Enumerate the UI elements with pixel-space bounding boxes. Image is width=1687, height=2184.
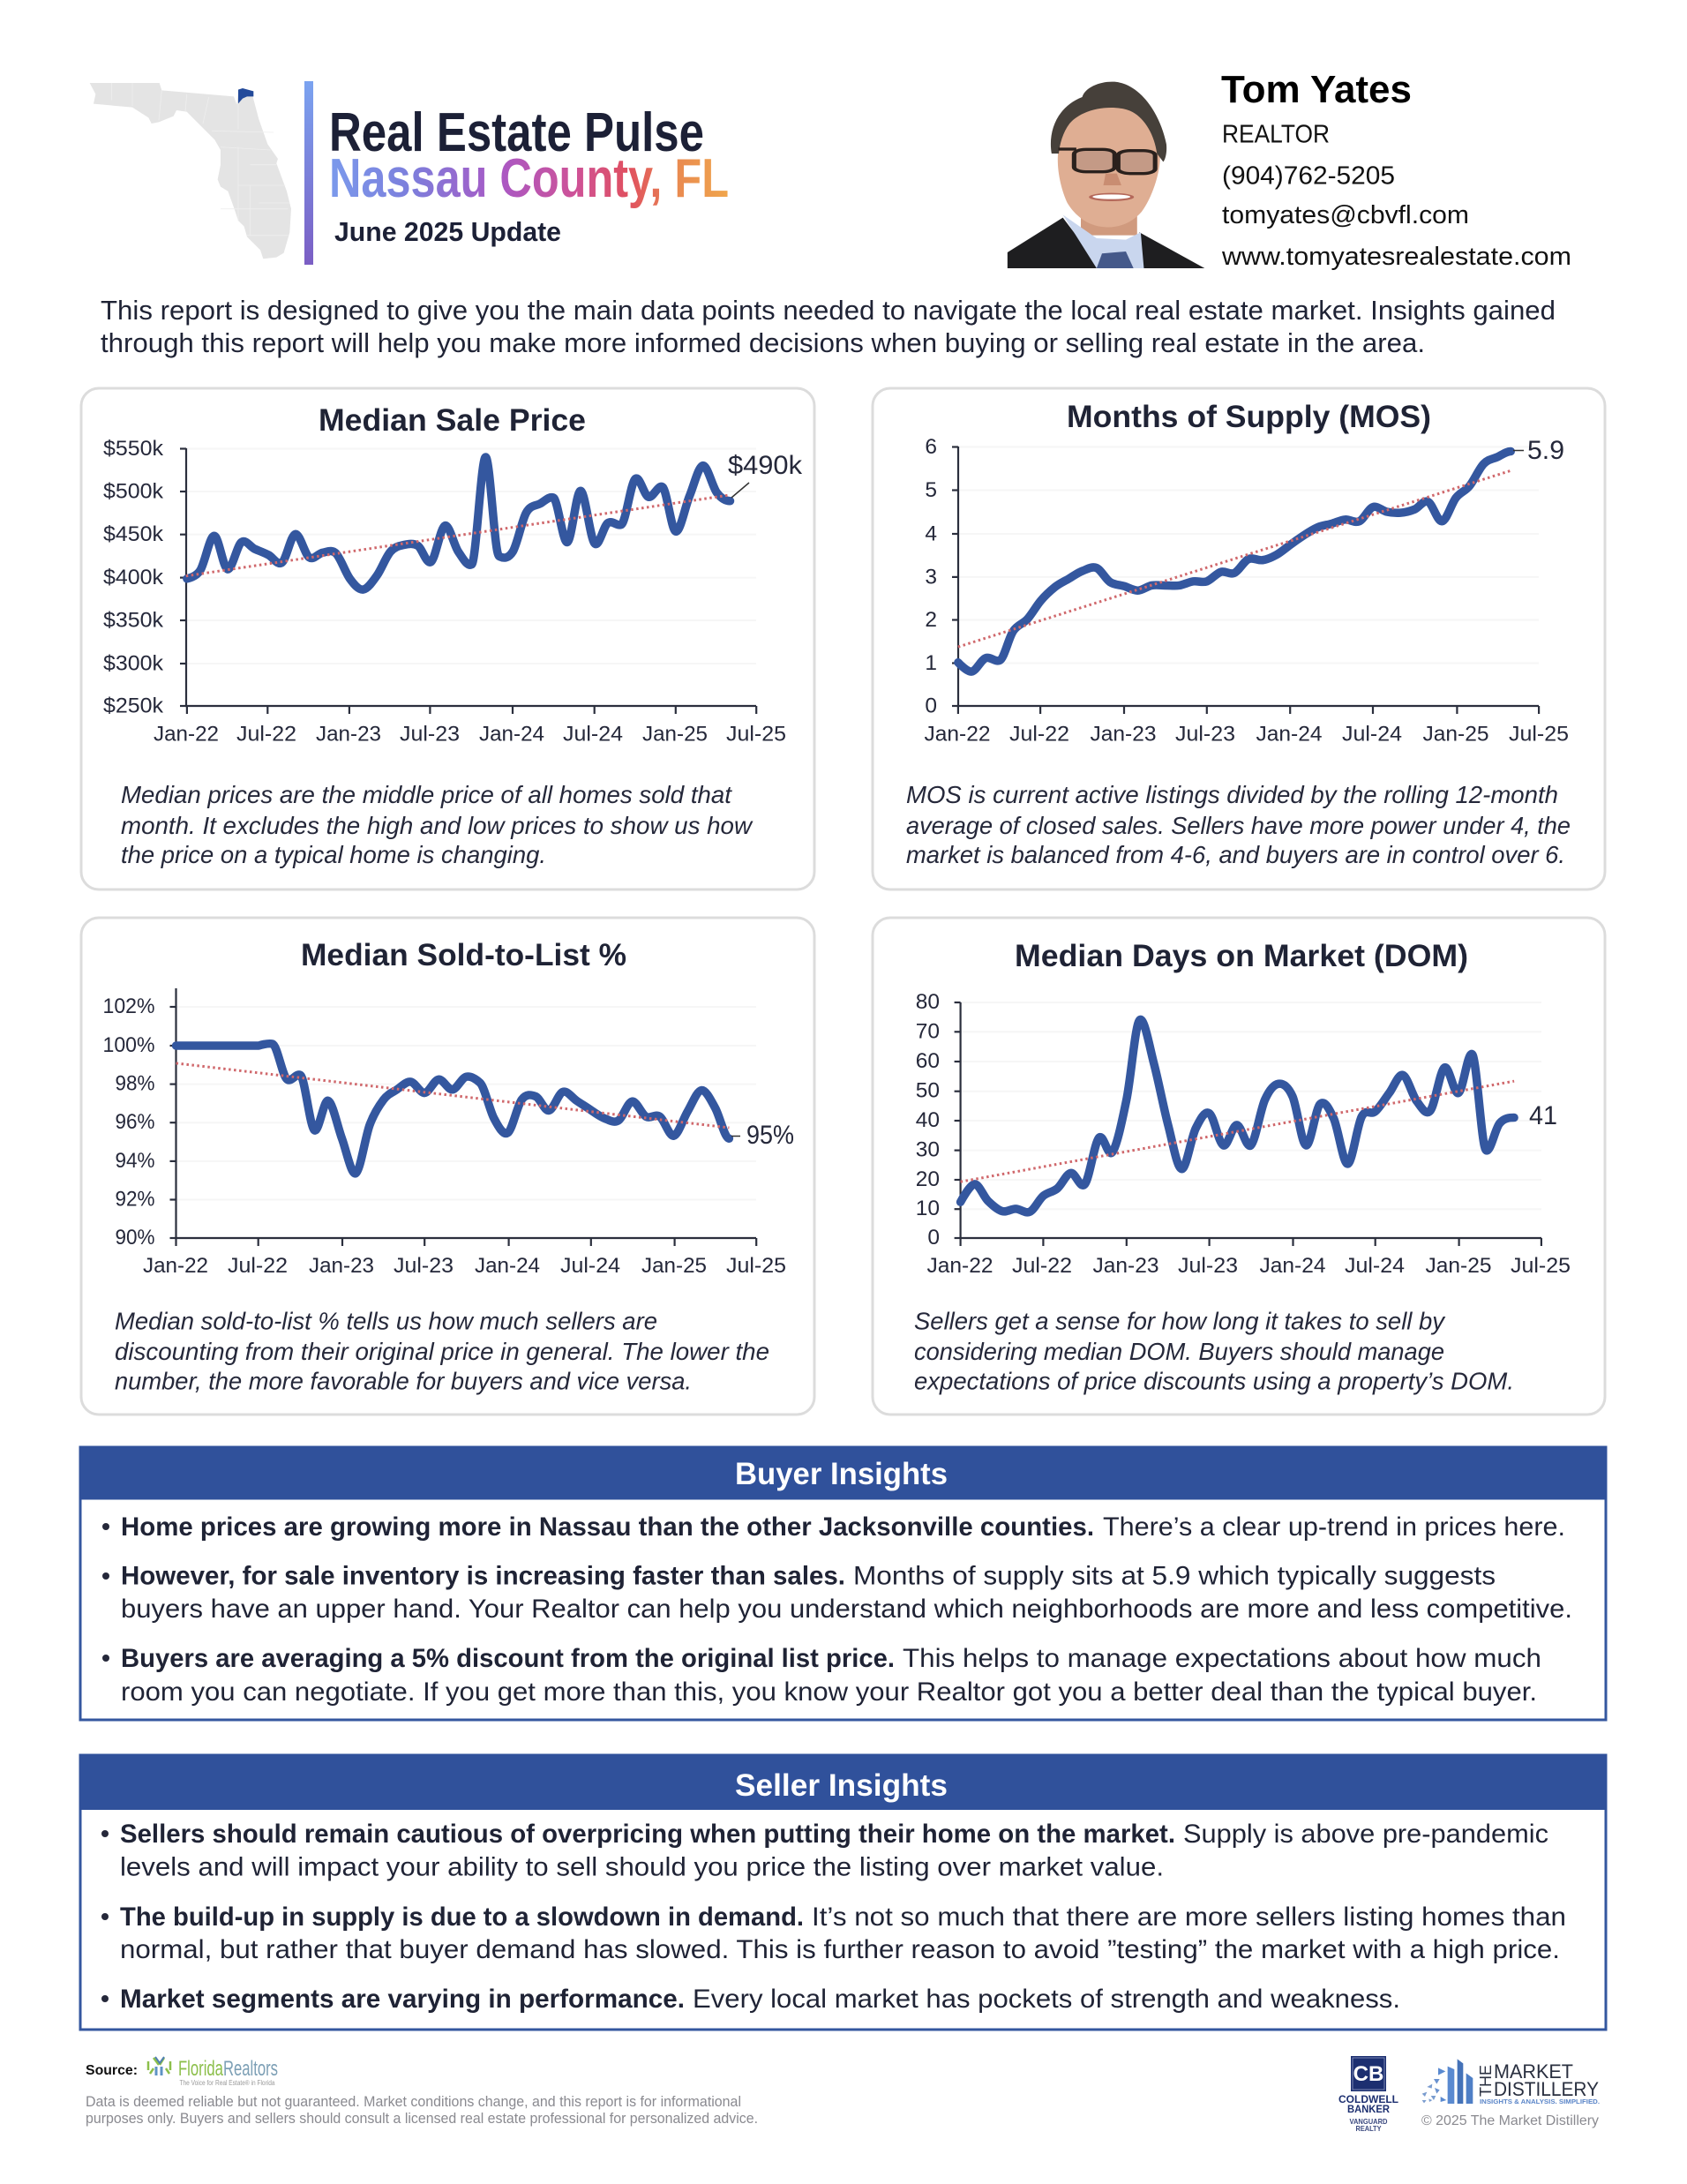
bullet 1 <box>102 1512 1565 1542</box>
y axis labels: days on market: 50 <box>916 1078 940 1103</box>
y axis labels: months of supply: 4 <box>925 522 937 545</box>
logo: Florida Realtors: FloridaRealtors <box>178 2057 278 2081</box>
x axis labels: sold-to-list: Jul-22 <box>228 1254 288 1278</box>
x axis labels: days on market: Jan-23 <box>1092 1254 1159 1278</box>
source label: Source: <box>86 2063 138 2078</box>
caption: months of supply: average of closed sales. Sellers have more power under 4, the <box>906 812 1571 839</box>
logo: Coldwell Banker Vanguard Realty: COLDWELL <box>1338 2095 1398 2105</box>
x axis labels: median sale price <box>154 722 786 747</box>
y axis labels: median sale price: $300k <box>103 651 164 676</box>
agent contact info: www.tomyatesrealestate.com <box>1221 243 1571 271</box>
title: June 2025 Update <box>334 217 561 247</box>
x axis labels: sold-to-list: Jan-22 <box>143 1254 208 1278</box>
header bar: buyer insights <box>79 1446 1607 1500</box>
icon: buildings <box>1422 2059 1473 2104</box>
x axis labels: sold-to-list <box>143 1254 786 1278</box>
x axis labels: sold-to-list: Jul-25 <box>726 1254 786 1278</box>
header gradient bar <box>304 81 313 265</box>
y axis labels: months of supply: 6 <box>925 435 937 459</box>
y axis labels: months of supply: 5 <box>925 478 937 502</box>
x axis labels: days on market <box>926 1254 1571 1278</box>
heading: sold-to-list: Median Sold-to-List % <box>301 937 626 972</box>
y axis labels: days on market: 40 <box>916 1108 940 1132</box>
bullet 3 <box>102 1644 1541 1707</box>
caption: median sale price: month. It excludes the high and low prices to show us how <box>121 812 754 839</box>
disclaimer: purposes only. Buyers and sellers should consult a licensed real estate professional for personalized advice. <box>86 2111 758 2127</box>
y axis labels: days on market: 10 <box>916 1197 940 1220</box>
y axis labels: months of supply: 0 <box>925 694 937 718</box>
bullet 2: Months of supply sits at 5.9 which typically suggests <box>853 1562 1496 1590</box>
y axis labels: sold-to-list: 98% <box>115 1071 155 1096</box>
x axis labels: median sale price: Jan-23 <box>316 722 381 747</box>
icon: Florida map with Nassau County highlighted <box>90 83 291 259</box>
logo: The Market Distillery <box>1422 2059 1600 2105</box>
x axis labels: months of supply: Jan-24 <box>1256 722 1322 747</box>
line chart: median sale price <box>186 457 731 589</box>
bullet 2: buyers have an upper hand. Your Realtor can help you understand which neighborhoods are more and less competitive. <box>121 1595 1572 1624</box>
agent contact info <box>1221 69 1571 271</box>
bullet 3: Market segments are varying in performance. <box>120 1985 685 2014</box>
caption: days on market: considering median DOM. Buyers should manage <box>914 1338 1444 1365</box>
bullet 3 <box>101 1985 1400 2014</box>
bullet 2: It’s not so much that there are more sellers listing homes than <box>812 1903 1566 1932</box>
caption: median sale price: the price on a typical home is changing. <box>121 841 546 868</box>
y axis labels: months of supply <box>925 435 937 718</box>
line chart: days on market <box>961 1019 1514 1212</box>
bullet 1 <box>101 1820 1548 1881</box>
y axis labels: days on market: 20 <box>916 1167 940 1191</box>
caption: sold-to-list <box>115 1308 769 1394</box>
y axis labels: median sale price: $500k <box>103 480 164 503</box>
y axis labels: sold-to-list: 96% <box>115 1110 155 1134</box>
title: Real Estate Pulse <box>329 101 704 163</box>
bullet 2 <box>101 1903 1566 1964</box>
panel: median days on market <box>873 918 1605 1415</box>
x axis labels: months of supply: Jul-24 <box>1342 722 1402 747</box>
disclaimer: Data is deemed reliable but not guaranteed. Market conditions change, and this report is for informational <box>86 2094 741 2110</box>
chart axes: median sale price <box>180 448 756 714</box>
caption: median sale price: Median prices are the middle price of all homes sold that <box>121 781 732 808</box>
caption: days on market: Sellers get a sense for how long it takes to sell by <box>914 1308 1446 1334</box>
x axis labels: median sale price: Jul-24 <box>563 722 623 747</box>
logo: The Market Distillery: DISTILLERY <box>1494 2078 1599 2100</box>
caption: months of supply: MOS is current active listings divided by the rolling 12-month <box>906 781 1558 808</box>
agent contact info: Tom Yates <box>1221 69 1412 111</box>
y axis labels: sold-to-list: 90% <box>115 1226 155 1250</box>
x axis labels: median sale price: Jan-24 <box>479 722 544 747</box>
copyright: © 2025 The Market Distillery <box>1421 2113 1599 2128</box>
heading: buyer insights: Buyer Insights <box>735 1457 948 1491</box>
panel: months of supply <box>873 388 1605 889</box>
x axis labels: months of supply: Jan-22 <box>925 722 990 747</box>
y axis labels: days on market: 0 <box>927 1226 940 1250</box>
x axis labels: median sale price: Jul-22 <box>236 722 296 747</box>
chart axes: sold-to-list <box>169 988 756 1246</box>
y axis labels: sold-to-list: 102% <box>102 994 155 1018</box>
x axis labels: median sale price: Jul-23 <box>400 722 460 747</box>
x axis labels: days on market: Jul-22 <box>1012 1254 1072 1278</box>
x axis labels: days on market: Jan-22 <box>926 1254 993 1278</box>
y axis labels: days on market: 60 <box>916 1049 940 1073</box>
x axis labels: months of supply: Jan-25 <box>1422 722 1489 747</box>
bullet 3: This helps to manage expectations about how much <box>903 1644 1541 1673</box>
callout: latest MOS: 5.9 <box>1527 436 1564 465</box>
y axis labels: days on market: 70 <box>916 1020 940 1043</box>
heading: seller insights: Seller Insights <box>735 1768 948 1803</box>
x axis labels: days on market: Jul-23 <box>1178 1254 1238 1278</box>
panel: median sale price <box>81 388 814 889</box>
x axis labels: months of supply: Jul-22 <box>1009 722 1069 747</box>
x axis labels: days on market: Jan-25 <box>1426 1254 1491 1278</box>
x axis labels: days on market: Jan-24 <box>1260 1254 1325 1278</box>
x axis labels: sold-to-list: Jan-23 <box>309 1254 374 1278</box>
header bar: seller insights <box>79 1754 1607 1810</box>
logo: Coldwell Banker Vanguard Realty: VANGUARD <box>1350 2117 1387 2126</box>
bullet 1: Sellers should remain cautious of overpricing when putting their home on the market. <box>120 1820 1175 1849</box>
panel: buyer insights <box>79 1446 1607 1720</box>
intro text: through this report will help you make more informed decisions when buying or selling real estate in the area. <box>101 327 1425 358</box>
bullet 1: levels and will impact your ability to sell should you price the listing over market value. <box>120 1853 1164 1881</box>
logo: Florida Realtors <box>148 2057 278 2087</box>
bullet 3: room you can negotiate. If you get more than this, you know your Realtor got you a better deal than the typical buyer. <box>121 1677 1537 1707</box>
caption: days on market <box>914 1308 1514 1394</box>
bullet 2: normal, but rather that buyer demand has slowed. This is further reason to avoid ”testing” the market with a high price. <box>120 1935 1560 1964</box>
y axis labels: median sale price: $550k <box>103 437 164 461</box>
y axis labels: days on market: 80 <box>916 990 940 1014</box>
caption: days on market: expectations of price discounts using a property’s DOM. <box>914 1368 1514 1394</box>
title <box>329 101 729 247</box>
heading: months of supply: Months of Supply (MOS) <box>1067 399 1431 434</box>
x axis labels: months of supply: Jul-25 <box>1509 722 1569 747</box>
bullet 1: Supply is above pre-pandemic <box>1183 1820 1548 1849</box>
title: Nassau County, FL <box>329 147 729 209</box>
y axis labels: median sale price: $450k <box>103 522 164 546</box>
bullet 2 <box>102 1562 1572 1624</box>
portrait of agent <box>1008 82 1204 268</box>
intro text: This report is designed to give you the main data points needed to navigate the local real estate market. Insights gained <box>101 295 1556 326</box>
intro text <box>101 295 1556 358</box>
chart axes: months of supply <box>952 447 1539 714</box>
y axis labels: sold-to-list <box>102 994 155 1250</box>
callout: latest price <box>728 451 802 498</box>
y axis labels: sold-to-list: 94% <box>115 1149 155 1173</box>
x axis labels: months of supply: Jan-23 <box>1091 722 1156 747</box>
bullet 3: Every local market has pockets of strength and weakness. <box>693 1985 1400 2014</box>
heading: median sale price: Median Sale Price <box>319 402 586 438</box>
logo: Coldwell Banker Vanguard Realty: CB <box>1353 2062 1383 2086</box>
bullet 3: Buyers are averaging a 5% discount from the original list price. <box>121 1644 895 1673</box>
panel: seller insights <box>79 1754 1607 2030</box>
caption: months of supply <box>906 781 1571 868</box>
chart axes: days on market <box>955 1002 1541 1246</box>
line chart: sold-to-list <box>176 1044 729 1174</box>
bullet 2: However, for sale inventory is increasing faster than sales. <box>121 1562 845 1590</box>
x axis labels: sold-to-list: Jul-23 <box>394 1254 454 1278</box>
x axis labels: median sale price: Jul-25 <box>726 722 786 747</box>
callout: latest sold-to-list: 95% <box>746 1121 794 1150</box>
bullet 1: Home prices are growing more in Nassau than the other Jacksonville counties. <box>121 1512 1094 1542</box>
line chart: months of supply <box>958 452 1511 672</box>
panel: median sold-to-list <box>81 918 814 1415</box>
logo: Coldwell Banker Vanguard Realty: REALTY <box>1355 2124 1382 2133</box>
x axis labels: sold-to-list: Jul-24 <box>560 1254 620 1278</box>
caption: months of supply: market is balanced from 4-6, and buyers are in control over 6. <box>906 841 1565 868</box>
caption: sold-to-list: Median sold-to-list % tells us how much sellers are <box>115 1308 657 1334</box>
y axis labels: median sale price: $350k <box>103 609 164 632</box>
y axis labels: median sale price: $400k <box>103 566 164 589</box>
logo: The Market Distillery: THE <box>1477 2065 1495 2097</box>
callout: latest price: $490k <box>728 451 802 480</box>
x axis labels: months of supply: Jul-23 <box>1175 722 1235 747</box>
logo: The Market Distillery: MARKET <box>1494 2060 1573 2083</box>
y axis labels: median sale price <box>103 437 164 718</box>
caption: median sale price <box>121 781 754 868</box>
y axis labels: sold-to-list: 100% <box>102 1033 155 1057</box>
x axis labels: months of supply <box>925 722 1569 747</box>
y axis labels: days on market <box>916 990 940 1250</box>
x axis labels: sold-to-list: Jan-24 <box>475 1254 540 1278</box>
caption: sold-to-list: number, the more favorable for buyers and vice versa. <box>115 1368 692 1394</box>
heading: days on market: Median Days on Market (DOM) <box>1015 938 1468 973</box>
x axis labels: sold-to-list: Jan-25 <box>641 1254 707 1278</box>
x axis labels: days on market: Jul-25 <box>1511 1254 1571 1278</box>
y axis labels: months of supply: 1 <box>925 651 937 675</box>
agent contact info: (904)762-5205 <box>1222 162 1395 191</box>
y axis labels: months of supply: 2 <box>925 608 937 632</box>
logo: The Market Distillery: INSIGHTS & ANALYSIS. SIMPLIFIED. <box>1480 2098 1600 2105</box>
bullet 1: There’s a clear up-trend in prices here. <box>1103 1512 1565 1542</box>
caption: sold-to-list: discounting from their original price in general. The lower the <box>115 1338 769 1365</box>
agent contact info: REALTOR <box>1222 120 1330 148</box>
x axis labels: median sale price: Jan-25 <box>642 722 708 747</box>
logo: Florida Realtors: The Voice for Real Estate® in Florida <box>180 2079 275 2087</box>
y axis labels: median sale price: $250k <box>103 694 164 718</box>
x axis labels: days on market: Jul-24 <box>1345 1254 1405 1278</box>
agent contact info: tomyates@cbvfl.com <box>1222 201 1469 229</box>
callout: latest DOM: 41 <box>1529 1101 1557 1130</box>
x axis labels: median sale price: Jan-22 <box>154 722 219 747</box>
disclaimer <box>86 2094 758 2127</box>
logo: Coldwell Banker Vanguard Realty <box>1338 2056 1398 2133</box>
y axis labels: sold-to-list: 92% <box>115 1188 155 1211</box>
y axis labels: months of supply: 3 <box>925 565 937 589</box>
bullet 2: The build-up in supply is due to a slowdown in demand. <box>120 1903 804 1932</box>
y axis labels: days on market: 30 <box>916 1138 940 1161</box>
logo: Coldwell Banker Vanguard Realty: BANKER <box>1347 2105 1391 2115</box>
